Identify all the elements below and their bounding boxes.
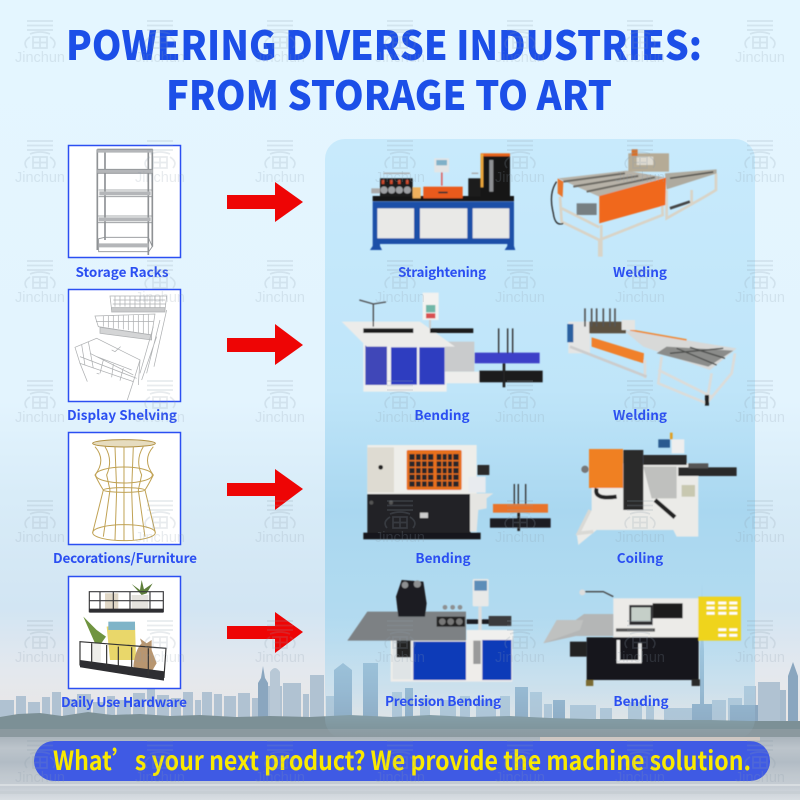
machine: bending yellow <box>543 589 741 686</box>
title <box>66 14 702 122</box>
panel: products column <box>53 146 197 711</box>
title: POWERING DIVERSE INDUSTRIES: <box>66 14 702 72</box>
arrow 1 <box>227 182 303 222</box>
machine labels: Straightening <box>398 261 486 281</box>
label: Display Shelving <box>67 404 177 424</box>
product card: storage racks <box>68 146 180 258</box>
machine labels: Bending <box>613 690 669 710</box>
tree line <box>0 712 800 737</box>
machine labels: Bending <box>415 547 471 567</box>
arrow 2 <box>227 324 303 365</box>
machine: welding 2 <box>567 308 737 406</box>
machine labels: Welding <box>613 404 667 424</box>
arrows <box>227 182 303 653</box>
machine: coiling <box>577 433 737 545</box>
water <box>0 737 800 800</box>
machine labels: Bending <box>414 404 470 424</box>
panel: machines backdrop <box>325 139 755 739</box>
arrow 4 <box>227 612 303 653</box>
title: FROM STORAGE TO ART <box>166 64 612 122</box>
machine: precision bending <box>347 579 513 682</box>
arrow 3 <box>227 469 303 510</box>
machine labels <box>385 261 669 710</box>
label: Decorations/Furniture <box>53 547 197 567</box>
machine: straightening <box>370 153 515 250</box>
machine labels: Coiling <box>617 547 663 567</box>
machine: welding 1 <box>551 149 717 257</box>
machine: bending blue <box>342 293 543 392</box>
machines <box>342 149 741 686</box>
product card: decorations and furniture <box>68 432 180 544</box>
machine labels: Precision Bending <box>385 690 501 710</box>
product card: display shelving <box>68 290 180 402</box>
label: Daily Use Hardware <box>61 691 187 711</box>
machine: bending black and orange <box>363 445 551 539</box>
city skyline <box>0 582 800 737</box>
product card: daily use hardware <box>68 576 180 688</box>
machine labels: Welding <box>613 261 667 281</box>
label: Storage Racks <box>75 261 169 281</box>
